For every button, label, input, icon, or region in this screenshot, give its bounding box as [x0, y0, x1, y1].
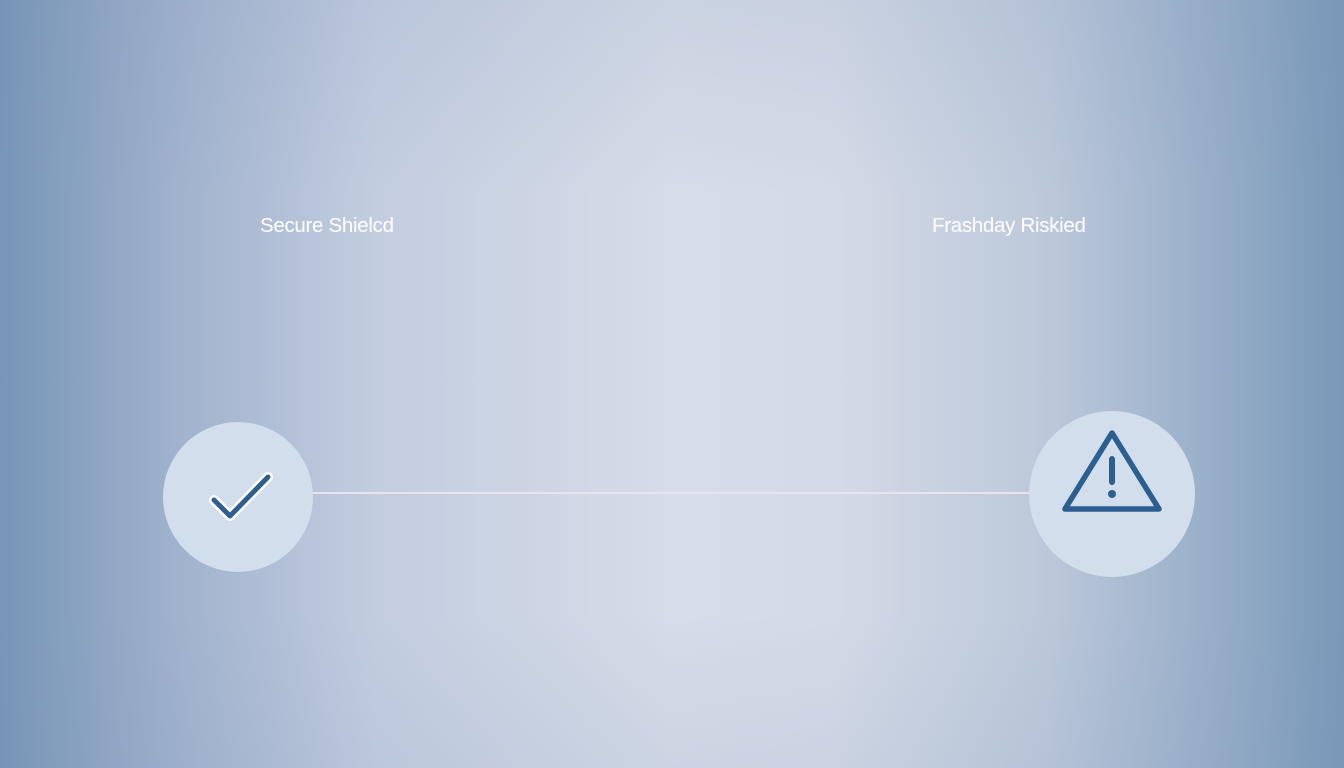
- label: secure shield: Secure Shielcd: [260, 214, 394, 237]
- connector line: [312, 492, 1032, 494]
- label: risk: Frashday Riskied: [932, 214, 1086, 237]
- icon: warning circle: [1029, 411, 1195, 577]
- icon: check circle: [163, 422, 313, 572]
